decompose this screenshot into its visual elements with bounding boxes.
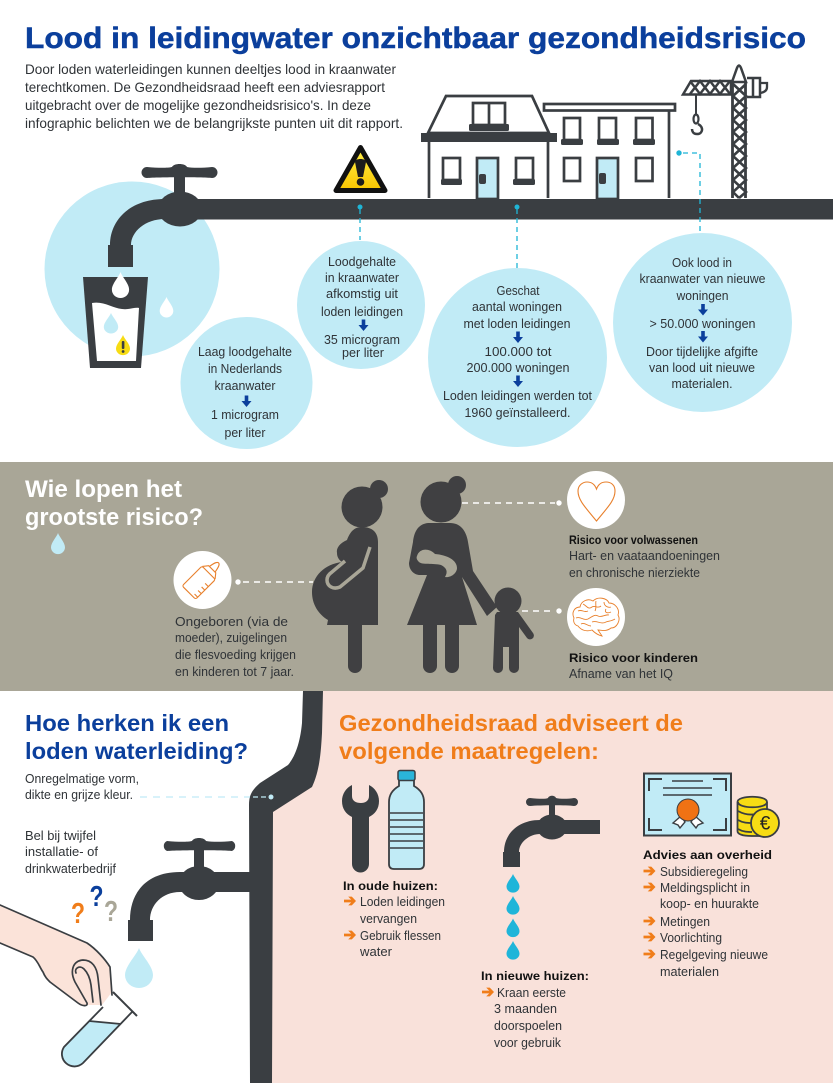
icon: heart [567, 471, 625, 529]
intro text [25, 61, 403, 131]
drop beside glass [160, 297, 173, 317]
icon: tap with drops [503, 796, 600, 960]
heading: recommendations [339, 710, 683, 764]
icon: hand [0, 905, 112, 1006]
icon: wrench [342, 785, 379, 872]
callout: lead from lead pipes: loden leidingen [321, 305, 403, 319]
panel: who is most at risk [0, 462, 833, 691]
heading: risk: grootste risico? [25, 504, 203, 531]
callout: low lead level: Laag loodgehalte [198, 345, 292, 359]
intro text: uitgebracht over de mogelijke gezondheidsrisico's. In deze [25, 97, 371, 113]
text: risk for children [569, 653, 698, 681]
icon: test tube [62, 992, 132, 1066]
text: new houses: voor gebruik [494, 1036, 562, 1050]
text: when in doubt: Bel bij twijfel [25, 829, 96, 843]
text: vulnerable groups: Ongeboren (via de [175, 615, 288, 629]
callout: estimated homes with lead pipes: 1960 geïnstalleerd. [464, 406, 570, 420]
callout: lead from lead pipes: afkomstig uit [326, 287, 399, 301]
text: advice to government [643, 850, 772, 979]
icon: question marks: ? [104, 896, 118, 928]
intro text: infographic belichten we de belangrijkste punten uit dit rapport. [25, 115, 403, 131]
text: advice to government: Voorlichting [660, 931, 722, 945]
callout: lead in new homes [613, 233, 792, 412]
text: old houses: In oude huizen: [343, 881, 438, 893]
text: when in doubt: installatie- of [25, 845, 99, 859]
text: old houses: Loden leidingen [360, 895, 445, 909]
text: vulnerable groups: moeder), zuigelingen [175, 631, 287, 645]
callout: lead in new homes: kraanwater van nieuwe [640, 272, 766, 286]
text: advice to government: materialen [660, 965, 719, 979]
intro text: Door loden waterleidingen kunnen deeltjes lood in kraanwater [25, 61, 396, 77]
text: when in doubt [25, 829, 117, 876]
text: appearance: Onregelmatige vorm, [25, 772, 139, 786]
text: new houses: Kraan eerste [497, 986, 566, 1000]
callout: lead from lead pipes [297, 241, 425, 369]
callout: lead from lead pipes: per liter [342, 346, 384, 360]
icon: question marks: ? [90, 881, 104, 913]
icon: question marks [71, 881, 118, 930]
callout: lead in new homes: > 50.000 woningen [650, 317, 756, 331]
text: advice to government: Regelgeving nieuwe [660, 948, 768, 962]
text: risk for children: Afname van het IQ [569, 667, 673, 681]
heading: recommendations: volgende maatregelen: [339, 738, 599, 764]
text: vulnerable groups [175, 615, 296, 679]
icon: construction crane [683, 66, 767, 198]
callout: low lead level: kraanwater [214, 379, 276, 393]
connector: adult to heart [462, 500, 562, 506]
callout: estimated homes with lead pipes: 200.000 woningen [466, 361, 570, 375]
connector: houses to circle [514, 204, 520, 268]
text: new houses: 3 maanden [494, 1002, 557, 1016]
heading: risk [25, 476, 203, 531]
icon: euro coins: € [760, 814, 771, 834]
big light blue circle behind tap [44, 182, 220, 356]
callout: estimated homes with lead pipes [428, 268, 607, 447]
connector: appearance to pipe [140, 794, 274, 800]
callout: low lead level: 1 microgram [211, 408, 279, 422]
text: advice to government: Advies aan overheid [643, 850, 772, 862]
heading: recommendations: Gezondheidsraad adviseert de [339, 710, 683, 736]
vertical wall pipe [249, 691, 323, 1083]
callout: estimated homes with lead pipes: aantal woningen [472, 300, 562, 314]
callout: lead in new homes: woningen [676, 289, 729, 303]
figure: child [493, 588, 534, 673]
text: vulnerable groups: die flesvoeding krijgen [175, 648, 296, 662]
figure: mother with baby [407, 476, 497, 673]
heading: how to recognise [25, 710, 248, 764]
icon: small drop [51, 533, 65, 554]
icon: question marks: ? [71, 898, 85, 930]
text: new houses: In nieuwe huizen: [481, 971, 589, 983]
text: risk for adults: en chronische nierziekte [569, 566, 700, 580]
callout: low lead level: in Nederlands [208, 362, 282, 376]
main horizontal water pipe [190, 199, 833, 220]
text: advice to government: Metingen [660, 915, 710, 929]
callout: lead in new homes: Door tijdelijke afgifte [646, 345, 758, 359]
lead warning drop [116, 335, 130, 355]
icon: baby bottle [174, 551, 232, 609]
panel: recommendations background [260, 691, 833, 1083]
connector: crane to circle [676, 150, 700, 233]
figure: pregnant woman [312, 480, 388, 673]
icon: tap [108, 164, 217, 267]
icon: water bottle [389, 770, 424, 869]
text: old houses: water [359, 945, 392, 959]
callout: low lead level: per liter [224, 426, 266, 440]
callout: lead from lead pipes: Loodgehalte [328, 255, 396, 269]
icon: falling drop [125, 948, 153, 988]
text: new houses: doorspoelen [494, 1019, 562, 1033]
icon: glass of water [83, 272, 173, 368]
callout: estimated homes with lead pipes: Loden leidingen werden tot [443, 389, 593, 403]
text: risk for children: Risico voor kinderen [569, 653, 698, 665]
heading: risk: Wie lopen het [25, 476, 182, 503]
text: risk for adults [569, 535, 720, 580]
text: new houses [481, 971, 589, 1050]
text: appearance [25, 772, 139, 802]
icon: warning triangle [336, 148, 385, 190]
text: when in doubt: drinkwaterbedrijf [25, 862, 117, 876]
callout: estimated homes with lead pipes: 100.000 tot [484, 345, 552, 359]
text: risk for adults: Risico voor volwassenen [569, 535, 698, 547]
callout: lead in new homes: van lood uit nieuwe [649, 361, 755, 375]
text: old houses [343, 881, 445, 959]
icon: new house [544, 104, 675, 199]
text: appearance: dikte en grijze kleur. [25, 788, 133, 802]
callout: lead from lead pipes: in kraanwater [325, 271, 399, 285]
text: old houses: vervangen [360, 912, 417, 926]
drop falling into glass [112, 272, 129, 298]
text: advice to government: Subsidieregeling [660, 865, 748, 879]
icon: test tube rim [113, 992, 137, 1016]
text: advice to government: Meldingsplicht in [660, 881, 750, 895]
title: Lood in leidingwater onzichtbaar gezondheidsrisico [25, 22, 806, 55]
text: risk for adults: Hart- en vaataandoeningen [569, 549, 720, 563]
callout: estimated homes with lead pipes: Geschat [496, 284, 540, 298]
text: advice to government: koop- en huurakte [660, 897, 759, 911]
connector: warning to circle [358, 204, 362, 240]
icon: old house [421, 96, 557, 199]
callout: lead from lead pipes: 35 microgram [324, 333, 400, 347]
callout: low lead level [180, 317, 312, 449]
icon: wall tap [128, 838, 250, 941]
heading: how to recognise: loden waterleiding? [25, 738, 248, 764]
drop in water [104, 313, 118, 333]
connector: bottle to pregnant woman [235, 579, 313, 585]
text: vulnerable groups: en kinderen tot 7 jaar. [175, 665, 294, 679]
icon: euro coins [738, 797, 779, 837]
intro text: terechtkomen. De Gezondheidsraad heeft een adviesrapport [25, 79, 385, 95]
callout: lead in new homes: Ook lood in [672, 256, 732, 270]
icon: certificate [644, 774, 731, 836]
callout: estimated homes with lead pipes: met loden leidingen [464, 317, 571, 331]
connector: child to brain [522, 608, 562, 614]
heading: how to recognise: Hoe herken ik een [25, 710, 229, 736]
callout: lead in new homes: materialen. [672, 377, 732, 391]
text: old houses: Gebruik flessen [360, 929, 441, 943]
icon: brain [567, 588, 625, 646]
